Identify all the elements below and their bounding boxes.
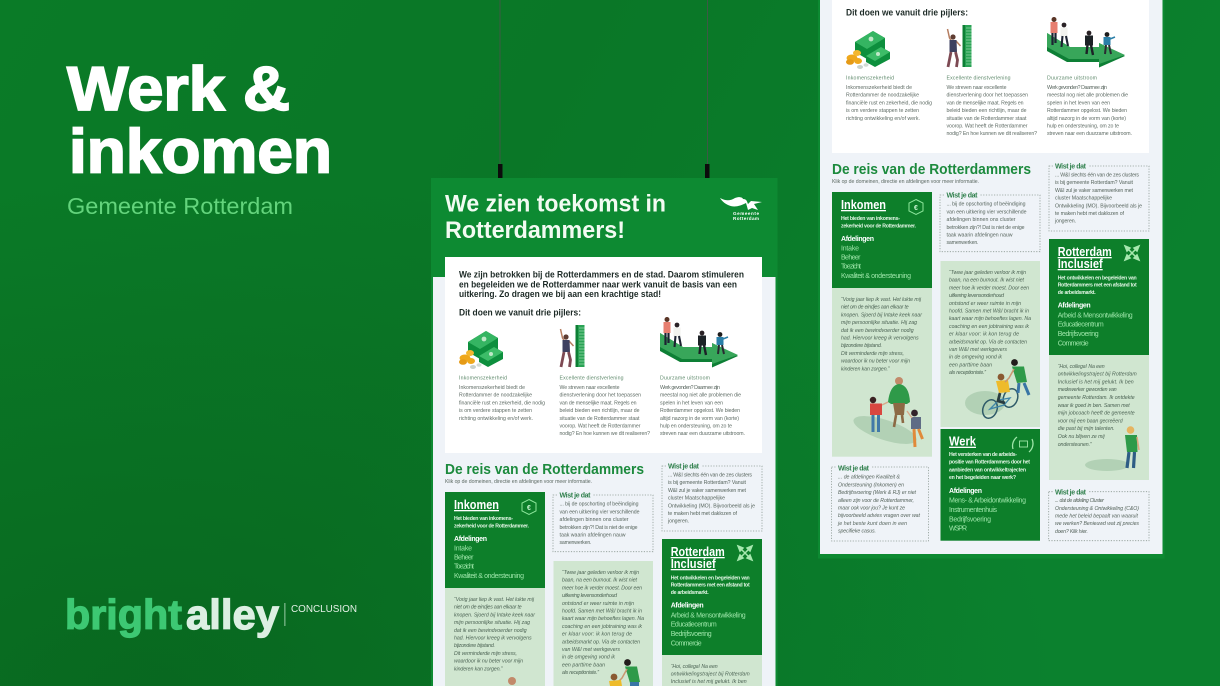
panel: quote Rotterdam Inclusief: mijn jobcoach heeft de gemeente	[1058, 411, 1135, 417]
section heading: De reis van de Rotterdammers: Klik op de domeinen, directie en afdelingen voor meer informatie.	[445, 479, 592, 485]
section heading: De reis van de Rotterdammers	[445, 461, 644, 485]
callout: Wist je dat 3: alleen zijn voor de Rotterdammer,	[838, 498, 914, 504]
intro text: en begeleiden we de Rotterdammer naar werk vanuit de basis van een	[459, 278, 737, 290]
panel: quote Werk: als receptioniste.”	[949, 370, 986, 376]
panel: quote Werk: “Twee jaar geleden verloor ik mijn	[562, 570, 639, 576]
callout: Wist je dat 2: van een uitkering vier verschillende	[946, 209, 1027, 215]
panel: quote Rotterdam Inclusief: Ook nu blijven ze mij	[1058, 434, 1106, 440]
callout: Wist je dat 1: W&I zul je vaker samenwerken met	[668, 488, 747, 494]
callout: Wist je dat 1: jongeren.	[1054, 219, 1076, 225]
callout: Wist je dat 1: cluster Maatschappelijke	[1055, 196, 1112, 202]
callout: Wist je dat 1: te maken hebt met daklozen of	[668, 511, 738, 517]
callout: Wist je dat 3: specifieke casus.	[838, 529, 876, 535]
pillar: Duurzame uitstroom: spelen in het leven van een	[1047, 100, 1110, 106]
pillar: Inkomenszekerheid	[459, 331, 545, 422]
panel: quote Rotterdam Inclusief: voor mij een baan gecreëerd	[1058, 418, 1124, 424]
hanging wires and clips	[498, 0, 710, 181]
panel: Rotterdam Inclusief: Het ontwikkelen en begeleiden van	[1058, 275, 1137, 281]
panel: quote Rotterdam Inclusief: medewerker geworden van	[1058, 387, 1117, 393]
panel: quote Werk	[554, 561, 653, 686]
panel: quote Werk: uitkering levensonderhoud	[562, 593, 618, 599]
panel: quote Werk: als receptioniste.”	[562, 670, 599, 676]
logo: bright alley conclusion: alley	[186, 591, 280, 638]
panel: quote Inkomen: mijn persoonlijke situatie. Hij zag	[841, 320, 917, 326]
panel: Inkomen	[832, 192, 932, 288]
title: Werk & inkomen	[67, 55, 332, 186]
pillar: Inkomenszekerheid: Inkomenszekerheid biedt de	[846, 85, 912, 91]
callout: Wist je dat 2: samenwerken.	[946, 240, 978, 246]
callout: Wist je dat 3: je het beste kunt doen in een	[837, 521, 907, 527]
pillar: Excellente dienstverlening: situatie van de Rotterdammer staat	[560, 416, 640, 422]
callout: Wist je dat 3: Wist je dat	[838, 466, 870, 473]
panel: Rotterdam Inclusief: Rotterdammers met een afstand tot	[671, 583, 750, 589]
panel: Werk: Bedrijfsvoering	[949, 516, 991, 523]
pillar: Inkomenszekerheid: richting ontwikkeling en/of werk.	[846, 116, 920, 122]
panel: quote Rotterdam Inclusief: “Hoi, collega! Na een	[1058, 364, 1105, 370]
pillar: Duurzame uitstroom: streven naar een duurzame uitstroom.	[1047, 131, 1132, 137]
panel: quote Werk: meer hoe ik verder moest. Door een	[949, 285, 1029, 291]
callout: Wist je dat 2: samenwerken.	[560, 540, 592, 546]
pillar: Duurzame uitstroom: Rotterdammer opgelost. We bieden	[1047, 108, 1127, 114]
panel: quote Werk: kaart waar mijn behoeftes lagen. Na	[949, 316, 1031, 322]
callout: Wist je dat 1: is bij gemeente Rotterdam? Vanuit	[668, 480, 747, 486]
icon: inward arrows	[738, 546, 752, 560]
pillar: Excellente dienstverlening: dienstverlening door het toepassen	[560, 393, 641, 399]
panel: Werk: positie van Rotterdammers door het	[949, 460, 1030, 466]
pillar: Inkomenszekerheid: Inkomenszekerheid biedt de	[459, 385, 525, 391]
logo: Gemeente Rotterdam: Gemeente	[733, 211, 759, 216]
logo: Gemeente Rotterdam	[720, 197, 762, 221]
pillar: Duurzame uitstroom: streven naar een duurzame uitstroom.	[660, 431, 745, 437]
panel: Inkomen: Inkomen	[841, 197, 886, 212]
panel: Werk	[940, 429, 1040, 541]
callout: Wist je dat 1: Ontwikkeling (MO). Bijvoorbeeld als je	[1055, 203, 1142, 209]
panel: quote Werk: hoofd. Samen met W&I bracht ik in	[562, 608, 642, 614]
title: Werk & inkomen: Werk &	[67, 55, 290, 124]
callout: Wist je dat 1: jongeren.	[667, 519, 689, 525]
panel: quote Inkomen	[445, 588, 545, 686]
poster heading	[445, 190, 666, 244]
callout: Wist je dat 1	[1049, 162, 1149, 231]
panel: quote Werk: coaching en een jobtraining was ik	[949, 324, 1029, 330]
panel: quote Rotterdam Inclusief: ondersteunen.”	[1058, 442, 1092, 448]
panel: quote Werk: baan, na een burnout. Ik wist niet	[562, 578, 638, 584]
pillar: Duurzame uitstroom: altijd nazorg in de vorm van (korte)	[1047, 116, 1126, 122]
icon: euro shield: €	[527, 505, 531, 512]
panel: quote Werk: hoofd. Samen met W&I bracht ik in	[949, 308, 1029, 314]
pillar: Excellente dienstverlening: We streven naar excellente	[560, 385, 620, 391]
panel: quote Inkomen: mijn persoonlijke situatie. Hij zag	[454, 620, 530, 626]
pillar: Excellente dienstverlening: van de menselijke maat. Regels en	[946, 100, 1024, 106]
pillar: Inkomenszekerheid: richting ontwikkeling en/of werk.	[459, 416, 533, 422]
panel: quote Werk: uitkering levensonderhoud	[949, 293, 1005, 299]
panel: Inkomen: zekerheid voor de Rotterdammer.	[454, 524, 530, 530]
panel: quote Werk: meer hoe ik verder moest. Door een	[562, 585, 642, 591]
callout: Wist je dat 4: we werken? Benieuwd wat zij precies	[1055, 521, 1139, 527]
panel: quote Inkomen: Dit verminderde mijn stress,	[841, 351, 904, 357]
pillar: Excellente dienstverlening: nodig? En hoe kunnen we dit realiseren?	[946, 131, 1037, 137]
panel: quote Inkomen: had. Hiervoor kreeg ik vervolgens	[454, 636, 532, 642]
callout: Wist je dat 4: Wist je dat	[1055, 490, 1087, 497]
callout: Wist je dat 2: betrokken zijn?! Dat is niet de enige	[946, 225, 1025, 231]
panel: Rotterdam Inclusief: Inclusief	[671, 556, 716, 571]
panel: quote Werk: van W&I met werkgevers	[949, 347, 1007, 353]
panel: Inkomen: Het bieden van inkomens-	[454, 516, 513, 522]
pillar: Duurzame uitstroom: Werk gevonden? Daarmee zijn	[660, 385, 720, 391]
panel: Inkomen: Inkomen	[454, 497, 499, 512]
poster: left (front view)	[431, 178, 778, 686]
panel: Rotterdam Inclusief: Het ontwikkelen en begeleiden van	[671, 575, 750, 581]
intro text: We zijn betrokken bij de Rotterdammers en de stad. Daarom stimuleren	[459, 268, 744, 280]
panel: Werk: Het versterken van de arbeids-	[949, 452, 1017, 458]
panel: quote Inkomen: kinderen kan zorgen.”	[454, 666, 503, 672]
pillar: Duurzame uitstroom: hulp en ondersteuning, om zo te	[660, 424, 732, 430]
panel: Rotterdam Inclusief: Arbeid & Mensontwikkeling	[671, 613, 746, 620]
pillar: Excellente dienstverlening: Excellente dienstverlening	[560, 376, 624, 382]
panel: quote Inkomen: knopen. Sjoerd bij Intake keek naar	[454, 612, 535, 618]
icon: briefcase	[1013, 437, 1033, 452]
callout: Wist je dat 3: ... de afdelingen Kwaliteit &	[838, 475, 901, 481]
callout: Wist je dat 4	[1049, 488, 1149, 541]
panel: quote Werk: baan, na een burnout. Ik wist niet	[949, 278, 1025, 284]
panel: quote Werk: er klaar voor: ik kon terug de	[562, 632, 632, 638]
logo: bright alley conclusion	[65, 591, 357, 638]
panel: Inkomen: Het bieden van inkomens-	[841, 216, 900, 222]
callout: Wist je dat 1: Wist je dat	[1055, 164, 1087, 170]
panel: Rotterdam Inclusief: Afdelingen	[1058, 303, 1091, 310]
pillar: Inkomenszekerheid: Inkomenszekerheid	[459, 376, 507, 382]
panel: Rotterdam Inclusief: Inclusief	[1058, 256, 1103, 271]
pillar: Duurzame uitstroom: meestal nog niet alle problemen die	[660, 393, 741, 399]
pillar: Excellente dienstverlening: van de menselijke maat. Regels en	[560, 400, 637, 406]
panel: Rotterdam Inclusief: Commercie	[671, 641, 702, 648]
callout: Wist je dat 3: bijvoorbeeld advies vragen over wat	[838, 513, 921, 519]
pillar: Excellente dienstverlening: beleid bieden een richtlijn, maar de	[560, 408, 640, 414]
callout: Wist je dat 1: te maken hebt met daklozen of	[1055, 211, 1125, 217]
callout: Wist je dat 1: is bij gemeente Rotterdam? Vanuit	[1055, 180, 1134, 186]
panel: quote Werk	[940, 261, 1040, 427]
panel: Inkomen: zekerheid voor de Rotterdammer.	[841, 224, 917, 230]
section heading: De reis van de Rotterdammers: De reis van de Rotterdammers	[445, 461, 644, 478]
pillar: Excellente dienstverlening: beleid bieden een richtlijn, maar de	[946, 108, 1027, 114]
pillar: Duurzame uitstroom	[660, 317, 745, 437]
panel: quote Werk: coaching en een jobtraining was ik	[562, 624, 642, 630]
panel: Rotterdam Inclusief: de arbeidsmarkt.	[671, 590, 709, 596]
panel: Inkomen: Toezicht	[841, 264, 861, 270]
white intro panel	[445, 257, 762, 453]
panel: Inkomen	[445, 492, 545, 588]
panel: Rotterdam Inclusief: Bedrijfsvoering	[671, 631, 712, 638]
callout: Wist je dat 2: van een uitkering vier verschillende	[560, 509, 640, 515]
callout: Wist je dat 1: W&I zul je vaker samenwerken met	[1055, 188, 1134, 194]
pillar: Duurzame uitstroom: meestal nog niet alle problemen die	[1047, 93, 1128, 99]
panel: Inkomen: Kwaliteit & ondersteuning	[454, 573, 524, 580]
panel: Werk: WSPR	[949, 526, 967, 533]
icon: inward arrows	[1125, 246, 1139, 260]
pillar: Duurzame uitstroom: Duurzame uitstroom	[1047, 76, 1097, 82]
callout: Wist je dat 2: Wist je dat	[560, 492, 591, 500]
pillar: Inkomenszekerheid: Inkomenszekerheid	[846, 76, 894, 82]
panel: Inkomen: Afdelingen	[841, 236, 874, 243]
panel: quote Werk: in de omgeving vond ik	[949, 355, 1002, 361]
panel: quote Inkomen: “Vorig jaar liep ik vast. Het lukte mij	[454, 597, 535, 603]
pillar: Excellente dienstverlening	[946, 25, 1037, 137]
white intro panel	[832, 0, 1149, 153]
panel: quote Rotterdam Inclusief: die past bij mijn talenten.	[1058, 426, 1115, 432]
panel: Inkomen: Kwaliteit & ondersteuning	[841, 273, 911, 280]
panel: quote Werk: een parttime baan	[562, 662, 605, 668]
subtitle: Gemeente Rotterdam: Gemeente Rotterdam	[67, 193, 293, 219]
poster heading: We zien toekomst in	[445, 190, 666, 218]
callout: Wist je dat 2: taak waarin afdelingen nauw	[560, 532, 626, 538]
callout: Wist je dat 2: ... bij de opschorting of beëindiging	[560, 502, 639, 508]
panel: Rotterdam Inclusief: de arbeidsmarkt.	[1058, 290, 1096, 296]
pillar: Inkomenszekerheid: is om verdere stappen te zetten	[459, 408, 532, 414]
callout: Wist je dat 1: cluster Maatschappelijke	[668, 496, 725, 502]
section heading: De reis van de Rotterdammers: De reis van de Rotterdammers	[832, 161, 1031, 178]
panel: quote Rotterdam Inclusief: ontwikkelingstraject bij Rotterdam	[1058, 372, 1137, 378]
pillar: Excellente dienstverlening: We streven naar excellente	[946, 85, 1007, 91]
pillar: Inkomenszekerheid: financiële rust en zekerheid, die nodig	[846, 100, 932, 106]
panel: quote Inkomen: Dit verminderde mijn stress,	[454, 651, 517, 657]
pillar: Duurzame uitstroom	[1047, 17, 1132, 137]
panel: quote Inkomen: kinderen kan zorgen.”	[841, 366, 890, 372]
callout: Wist je dat 4: mede het beleid bepaalt van waaruit	[1055, 514, 1139, 520]
pillar: Excellente dienstverlening	[560, 325, 650, 437]
panel: quote Rotterdam Inclusief: “Hoi, collega! Na een	[671, 664, 718, 670]
panel: Rotterdam Inclusief: Bedrijfsvoering	[1058, 331, 1099, 338]
panel: quote Inkomen: waardoor ik nu beter voor mijn	[454, 659, 523, 665]
callout: Wist je dat 2: afdelingen binnen ons cluster	[946, 217, 1016, 223]
icon: euro shield: €	[914, 205, 918, 212]
callout: Wist je dat 3	[832, 463, 929, 541]
callout: Wist je dat 4: Ondersteuning & Ontwikkeling (C&O)	[1055, 506, 1139, 512]
pillars heading: Dit doen we vanuit drie pijlers:	[459, 306, 581, 318]
panel: quote Inkomen: waardoor ik nu beter voor mijn	[841, 359, 910, 365]
panel: Inkomen: Afdelingen	[454, 536, 487, 543]
panel: Inkomen: Toezicht	[454, 564, 474, 570]
pillar: Excellente dienstverlening: Excellente dienstverlening	[946, 76, 1011, 82]
panel: quote Rotterdam Inclusief: Inclusief is het mij gelukt. Ik ben	[671, 679, 747, 685]
callout: Wist je dat 2: Wist je dat	[946, 192, 978, 200]
title: Werk & inkomen: inkomen	[69, 118, 332, 186]
callout: Wist je dat 2: betrokken zijn?! Dat is niet de enige	[560, 525, 638, 531]
callout: Wist je dat 1: ... W&I slechts één van de zes clusters	[668, 472, 752, 478]
poster: right (scrolled view)	[818, 0, 1164, 558]
panel: quote Rotterdam Inclusief	[662, 655, 762, 686]
panel: Rotterdam Inclusief: Rotterdammers met een afstand tot	[1058, 283, 1137, 289]
panel: Rotterdam Inclusief	[662, 539, 762, 655]
callout: Wist je dat 2: taak waarin afdelingen nauw	[946, 232, 1013, 238]
poster heading: Rotterdammers!	[445, 217, 625, 244]
logo: Gemeente Rotterdam: Rotterdam	[733, 216, 759, 221]
logo: bright alley conclusion: CONCLUSION	[291, 604, 357, 615]
pillar: Excellente dienstverlening: nodig? En hoe kunnen we dit realiseren?	[560, 431, 650, 437]
panel: Inkomen: Intake	[841, 246, 859, 252]
pillar: Excellente dienstverlening: situatie van de Rotterdammer staat	[946, 116, 1027, 122]
illustration: woman's head	[508, 677, 516, 685]
panel: quote Inkomen: bijzondere bijstand.	[454, 643, 495, 649]
section heading: De reis van de Rotterdammers	[832, 161, 1031, 185]
panel: Rotterdam Inclusief: Afdelingen	[671, 603, 704, 610]
panel: Werk: aanbieden van ontwikkeltrajecten	[949, 467, 1026, 473]
callout: Wist je dat 2: afdelingen binnen ons cluster	[560, 517, 629, 523]
panel: Inkomen: Beheer	[454, 554, 474, 562]
callout: Wist je dat 2	[940, 191, 1040, 252]
panel: Inkomen: Beheer	[841, 254, 861, 262]
panel: quote Inkomen: dat ik een bewindvoerder nodig	[454, 628, 527, 634]
panel: quote Werk: arbeidsmarkt op. Via de contacten	[562, 639, 640, 645]
panel: quote Inkomen: niet om de eindjes aan elkaar te	[841, 305, 909, 311]
panel: quote Werk: in de omgeving vond ik	[562, 655, 615, 661]
pillar: Inkomenszekerheid: is om verdere stappen te zetten	[846, 108, 919, 114]
callout: Wist je dat 3: maar ook voor jou? Je kunt ze	[838, 506, 905, 512]
panel: quote Werk: van W&I met werkgevers	[562, 647, 620, 653]
pillar: Inkomenszekerheid: Rotterdammer de noodzakelijke	[459, 393, 532, 399]
callout: Wist je dat 4: ... dat de afdeling Cluster	[1055, 498, 1104, 504]
panel: Werk: Afdelingen	[949, 488, 982, 495]
panel: quote Inkomen	[832, 288, 932, 457]
pillar: Excellente dienstverlening: voorop. Wat heeft de Rotterdammer	[946, 124, 1028, 130]
panel: Werk: Instrumentenhuis	[949, 507, 998, 514]
panel: Rotterdam Inclusief: Rotterdam	[671, 544, 725, 559]
pillars heading: Dit doen we vanuit drie pijlers:	[846, 6, 968, 18]
section heading: De reis van de Rotterdammers: Klik op de domeinen, directie en afdelingen voor meer informatie.	[832, 179, 979, 185]
panel: Werk: Mens- & Arbeidontwikkeling	[949, 498, 1026, 505]
panel: quote Rotterdam Inclusief: Inclusief is het mij gelukt. Ik ben	[1058, 379, 1134, 385]
panel: quote Inkomen: had. Hiervoor kreeg ik vervolgens	[841, 336, 919, 342]
callout: Wist je dat 2	[553, 491, 653, 552]
panel: quote Inkomen: “Vorig jaar liep ik vast. Het lukte mij	[841, 297, 922, 303]
panel: quote Inkomen: dat ik een bewindvoerder nodig	[841, 328, 914, 334]
panel: Rotterdam Inclusief: Rotterdam	[1058, 244, 1112, 259]
pillar: Duurzame uitstroom: hulp en ondersteuning, om zo te	[1047, 124, 1119, 130]
logo: bright alley conclusion: bright	[65, 591, 182, 638]
callout: Wist je dat 1: Wist je dat	[668, 464, 700, 470]
illustration: man and child (top)	[609, 659, 640, 686]
panel: quote Rotterdam Inclusief	[1049, 355, 1149, 480]
intro text	[459, 268, 744, 299]
pillar: Duurzame uitstroom: Rotterdammer opgelost. We bieden	[660, 408, 740, 414]
panel: quote Inkomen: knopen. Sjoerd bij Intake keek naar	[841, 312, 922, 318]
pillar: Excellente dienstverlening: dienstverlening door het toepassen	[946, 93, 1028, 99]
panel: quote Werk: ontstond er weer ruimte in mijn	[949, 301, 1021, 307]
pillar: Inkomenszekerheid: financiële rust en zekerheid, die nodig	[459, 400, 545, 406]
pillar: Duurzame uitstroom: altijd nazorg in de vorm van (korte)	[660, 416, 739, 422]
panel: Rotterdam Inclusief: Arbeid & Mensontwikkeling	[1058, 313, 1133, 320]
callout: Wist je dat 1: ... W&I slechts één van de zes clusters	[1055, 172, 1139, 178]
panel: Werk: Werk	[949, 434, 977, 449]
callout: Wist je dat 1: Ontwikkeling (MO). Bijvoorbeeld als je	[668, 503, 755, 509]
panel: Rotterdam Inclusief: Commercie	[1058, 341, 1089, 348]
intro text: uitkering. Zo dragen we bij aan een krachtige stad!	[459, 288, 661, 299]
callout: Wist je dat 4: doen? Klik hier.	[1055, 529, 1088, 535]
callout: Wist je dat 3: Bedrijfsvoering (Werk & RJ) er niet	[838, 490, 917, 496]
callout: Wist je dat 1	[662, 462, 762, 531]
panel: Rotterdam Inclusief: Educatiecentrum	[1058, 322, 1104, 329]
panel: Rotterdam Inclusief: Educatiecentrum	[671, 622, 717, 629]
pillar: Duurzame uitstroom: Werk gevonden? Daarmee zijn	[1047, 85, 1107, 91]
pillar: Duurzame uitstroom: Duurzame uitstroom	[660, 376, 710, 382]
panel: quote Werk: arbeidsmarkt op. Via de contacten	[949, 339, 1027, 345]
panel: quote Rotterdam Inclusief: waar ik goed in ben. Samen met	[1058, 403, 1130, 409]
panel: quote Werk: ontstond er weer ruimte in mijn	[562, 601, 634, 607]
pillar: Excellente dienstverlening: voorop. Wat heeft de Rotterdammer	[560, 424, 641, 430]
pillar: Inkomenszekerheid: Rotterdammer de noodzakelijke	[846, 93, 919, 99]
panel: Rotterdam Inclusief	[1049, 239, 1149, 355]
pillar: Inkomenszekerheid	[846, 31, 932, 122]
panel: Werk: en het begeleiden naar werk?	[949, 475, 1016, 481]
panel: quote Rotterdam Inclusief: ontwikkelingstraject bij Rotterdam	[671, 672, 750, 678]
pillar: Duurzame uitstroom: spelen in het leven van een	[660, 400, 723, 406]
panel: quote Werk: “Twee jaar geleden verloor ik mijn	[949, 270, 1026, 276]
callout: Wist je dat 2: ... bij de opschorting of beëindiging	[946, 202, 1026, 208]
panel: quote Inkomen: bijzondere bijstand.	[841, 343, 882, 349]
panel: Inkomen: Intake	[454, 546, 472, 552]
panel: quote Inkomen: niet om de eindjes aan elkaar te	[454, 605, 522, 611]
panel: quote Werk: een parttime baan	[949, 362, 992, 368]
panel: quote Rotterdam Inclusief: gemeente Rotterdam. Ik ontdekte	[1058, 395, 1135, 401]
panel: quote Werk: kaart waar mijn behoeftes lagen. Na	[562, 616, 644, 622]
callout: Wist je dat 3: Ondersteuning (Inkomen) en	[838, 482, 904, 488]
panel: quote Werk: er klaar voor: ik kon terug de	[949, 332, 1019, 338]
